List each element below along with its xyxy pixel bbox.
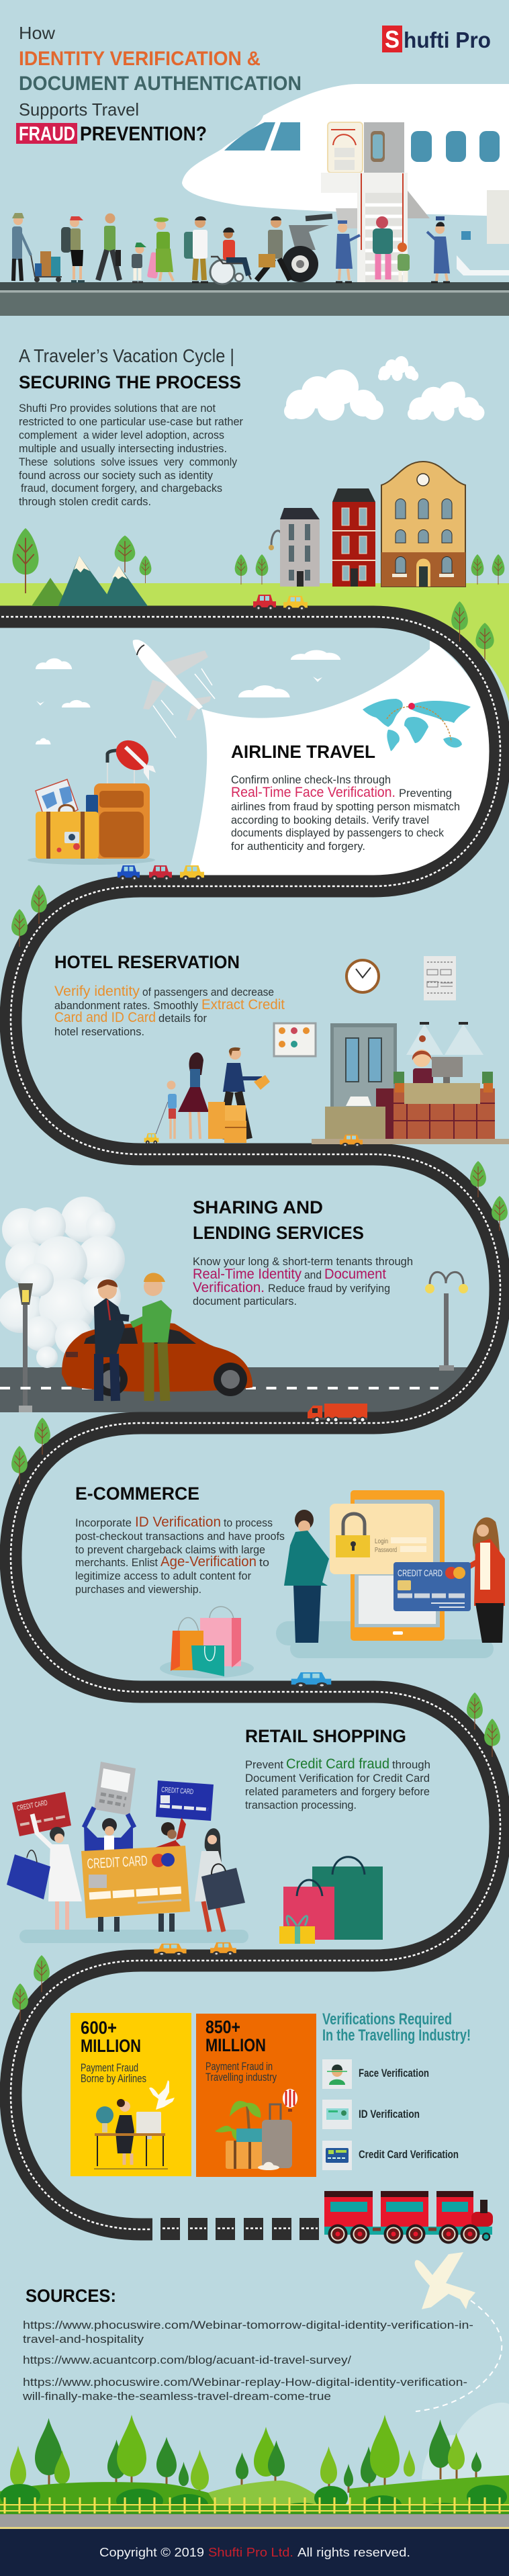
e-commerce text: to prevent chargeback claims with large <box>75 1543 265 1556</box>
footer: Shufti Pro Ltd. <box>208 2546 293 2559</box>
legs behind card <box>101 1914 172 1932</box>
red building <box>332 488 375 587</box>
person holding terminal <box>84 1807 134 1854</box>
item: face verification <box>322 2059 429 2089</box>
source links: https://www.acuantcorp.com/blog/acuant-id-travel-survey/ <box>23 2354 351 2366</box>
woman right <box>459 1517 505 1643</box>
woman in green with pink suitcase <box>147 218 173 281</box>
stat card: 850+ million: MILLION <box>205 2035 266 2055</box>
pavement <box>0 2514 509 2529</box>
item: face verification: Face Verification <box>359 2067 429 2079</box>
person holding blue card <box>154 1817 186 1851</box>
retail text: Credit Card fraud <box>286 1756 389 1772</box>
source links <box>22 2319 473 2403</box>
credit card: CREDIT CARD <box>398 1568 443 1578</box>
family with luggage <box>156 1047 270 1143</box>
credit card <box>394 1562 471 1611</box>
title: How <box>19 23 55 43</box>
woman climbing stairs <box>373 216 393 280</box>
sharing text <box>193 1255 413 1307</box>
airplane at the gate <box>182 84 509 244</box>
lamp post left <box>18 1283 33 1412</box>
world map <box>363 699 471 751</box>
orange car <box>62 1322 252 1396</box>
title: FRAUD <box>19 123 75 145</box>
icon: palm trees and luggage <box>215 2101 292 2170</box>
retail text: through <box>392 1758 430 1771</box>
blue card: CREDIT CARD <box>161 1786 194 1796</box>
intro paragraph: complement a wider level adoption, across <box>19 429 224 441</box>
airline text <box>231 773 460 853</box>
payment terminal <box>94 1762 136 1815</box>
hotel text: Extract Credit <box>201 997 285 1013</box>
e-commerce text: legitimize access to adult content for <box>75 1570 251 1582</box>
stat card: 850+ million: Payment Fraud in <box>205 2060 273 2073</box>
child climbing stairs <box>398 243 410 281</box>
white airline panel <box>188 638 490 875</box>
intro paragraph: These solutions solve issues very commonly <box>19 456 237 468</box>
hotel text: hotel reservations. <box>54 1025 144 1038</box>
bushes <box>0 2484 507 2516</box>
reception desk with receptionist <box>312 1035 509 1144</box>
section heading: vacation cycle: A Traveler’s Vacation Cycle | <box>19 345 234 366</box>
hotel text: Verify identity <box>54 984 140 999</box>
cars on road <box>118 865 204 882</box>
truck <box>308 1404 367 1422</box>
train <box>324 2191 493 2244</box>
e-commerce text: to process <box>224 1516 273 1529</box>
hotel text: of passengers and decrease <box>142 986 274 998</box>
grey building <box>280 508 320 587</box>
stat card: 600+ million <box>71 2013 191 2176</box>
retail text <box>245 1756 430 1811</box>
hotel text: Card and ID Card <box>54 1010 156 1025</box>
airline text: documents displayed by passengers to check <box>231 826 444 839</box>
sharing text: Know your long & short-term tenants through <box>193 1255 413 1268</box>
hotel text: details for <box>158 1012 207 1025</box>
trunks <box>49 2466 476 2493</box>
online payment illustration <box>276 1490 505 1658</box>
intro paragraph: restricted to one particular use-case but rather <box>19 415 243 428</box>
icon: agent at desk <box>94 2099 168 2169</box>
red card <box>12 1792 71 1836</box>
hills <box>0 2482 295 2514</box>
woman in white with blue bag <box>7 1814 82 1930</box>
man with backpack <box>184 216 208 282</box>
intro paragraph: fraud, document forgery, and chargebacks <box>21 482 222 495</box>
hotel text: abandonment rates. Smoothly <box>54 999 198 1012</box>
winding road <box>0 617 500 2229</box>
e-commerce text: Age-Verification <box>160 1554 257 1570</box>
forest landscape <box>0 2415 509 2516</box>
airline text: Preventing <box>399 787 452 800</box>
tan building <box>381 462 465 587</box>
intro paragraph: through stolen credit cards. <box>19 495 151 508</box>
sharing text: document particulars. <box>193 1295 297 1307</box>
e-commerce text: to <box>259 1556 269 1569</box>
sharing text: Document <box>324 1266 386 1282</box>
father <box>222 1047 270 1139</box>
flight attendant left <box>336 220 360 282</box>
landing gear <box>282 214 332 282</box>
source links: will-finally-make-the-seamless-travel-dream-come-true <box>22 2390 331 2403</box>
boarding stairs <box>357 173 408 282</box>
source links: https://www.phocuswire.com/Webinar-tomorrow-digital-identity-verification-in- <box>23 2319 473 2331</box>
fence <box>0 2497 509 2514</box>
blue sign <box>461 231 471 240</box>
woman with dark bag <box>195 1828 245 1932</box>
grey street <box>0 1367 470 1412</box>
airline text: for authenticity and forgery. <box>231 840 365 853</box>
icon: hot air balloon <box>283 2089 297 2112</box>
logo: Shufti Pro: S <box>385 26 400 53</box>
retail text: Document Verification for Credit Card <box>245 1772 430 1785</box>
online payment illustration: Login <box>375 1538 388 1545</box>
big credit card <box>81 1846 190 1918</box>
source links: travel-and-hospitality <box>23 2333 144 2346</box>
boy with cap <box>132 243 146 282</box>
ground runway <box>0 282 509 316</box>
man in green <box>132 1273 172 1401</box>
town cars <box>253 595 308 611</box>
title: Supports Travel <box>19 99 139 120</box>
small distant plane <box>457 255 509 275</box>
intro paragraph: found across our society such as identity <box>19 469 213 482</box>
delivery vans <box>154 1942 236 1957</box>
street lamp in town <box>269 531 297 587</box>
sharing text: and <box>304 1269 322 1281</box>
title: IDENTITY VERIFICATION & <box>19 48 261 70</box>
heading: hotel reservation: HOTEL RESERVATION <box>54 952 240 972</box>
mother <box>178 1052 209 1139</box>
e-commerce text: Incorporate <box>75 1516 132 1529</box>
airplane with dashed trail <box>415 2252 502 2411</box>
intro paragraph: multiple and usually intersecting industries. <box>19 442 227 455</box>
online payment illustration: Password <box>375 1547 397 1554</box>
trees along the landscape <box>11 528 508 2020</box>
exhaust smoke <box>0 1197 125 1368</box>
stat card: 850+ million <box>196 2014 316 2177</box>
heading: retail shopping: RETAIL SHOPPING <box>245 1726 406 1746</box>
key board <box>274 1023 316 1056</box>
title: DOCUMENT AUTHENTICATION <box>19 73 302 95</box>
intro paragraph: Shufti Pro provides solutions that are not <box>19 402 216 415</box>
luggage <box>208 1102 246 1143</box>
small flat clouds and birds <box>36 650 340 744</box>
retail text: related parameters and forgery before <box>245 1785 430 1798</box>
heading: sharing and lending services: SHARING AND <box>193 1197 323 1217</box>
section heading: vacation cycle <box>19 345 241 392</box>
businessman with briefcase <box>257 216 290 280</box>
title: PREVENTION? <box>80 123 207 145</box>
footer: Copyright © 2019 <box>99 2546 204 2559</box>
man in suit <box>94 1279 129 1401</box>
two men shaking hands <box>94 1273 172 1401</box>
e-commerce text: purchases and viewership. <box>75 1583 201 1596</box>
heading: sharing and lending services <box>193 1197 364 1243</box>
source links: https://www.phocuswire.com/Webinar-replay-How-digital-identity-verification- <box>23 2376 467 2389</box>
wall notice <box>424 956 456 1000</box>
verifications required panel: Verifications Required <box>322 2010 452 2028</box>
retail text: transaction processing. <box>245 1799 357 1811</box>
airline text: Confirm online check-Ins through <box>231 773 391 786</box>
airline text: Real-Time Face Verification. <box>231 785 396 800</box>
hotel text <box>54 984 285 1038</box>
blue card <box>156 1780 214 1821</box>
item: credit card verification: Credit Card Verification <box>359 2148 459 2161</box>
airplane flying <box>133 640 215 738</box>
stat card: 600+ million: MILLION <box>81 2036 141 2056</box>
stat card: 850+ million: 850+ <box>205 2017 240 2037</box>
airline text: according to booking details. Verify travel <box>231 814 429 826</box>
sharing text: Verification. <box>193 1280 265 1295</box>
stat card: 600+ million: Borne by Airlines <box>81 2072 146 2085</box>
child <box>156 1080 177 1139</box>
airline text: airlines from fraud by spotting person mismatch <box>231 800 460 813</box>
street dashes <box>0 1387 438 1389</box>
toy car and van <box>144 1133 363 1148</box>
man left <box>284 1510 329 1643</box>
red card: CREDIT CARD <box>16 1799 48 1813</box>
sources heading: SOURCES: <box>26 2286 116 2306</box>
grass band <box>0 583 509 702</box>
man with phone <box>98 214 121 280</box>
shopping bags <box>160 1606 254 1678</box>
retail crowd with credit cards <box>7 1762 248 1943</box>
heading: airline travel: AIRLINE TRAVEL <box>231 742 375 762</box>
stat card: 850+ million: Travelling industry <box>205 2071 277 2084</box>
ceiling lamps <box>406 1022 483 1055</box>
footer: All rights reserved. <box>297 2546 410 2559</box>
stat card: 600+ million: Payment Fraud <box>81 2061 138 2074</box>
item: id verification: ID Verification <box>359 2108 420 2120</box>
suitcases with hat and map <box>28 734 156 865</box>
logo: Shufti Pro: hufti Pro <box>404 28 491 52</box>
sharing text: Reduce fraud by verifying <box>268 1282 390 1295</box>
e-commerce text <box>75 1514 285 1596</box>
section heading: vacation cycle: SECURING THE PROCESS <box>19 372 241 392</box>
passengers queue <box>12 213 471 284</box>
retail text: Prevent <box>245 1758 283 1771</box>
hotel door <box>330 1023 397 1107</box>
icon: plane <box>149 2080 175 2110</box>
man with cart <box>12 213 62 282</box>
trees <box>10 2415 481 2490</box>
clouds <box>284 356 484 421</box>
e-commerce text: ID Verification <box>135 1514 221 1530</box>
footer <box>0 2529 509 2576</box>
wall clock <box>346 960 379 992</box>
flight attendant right <box>427 216 450 282</box>
heading: e-commerce: E-COMMERCE <box>75 1484 199 1504</box>
distant cloud <box>422 2403 509 2479</box>
gift and shopping bags <box>279 1857 383 1944</box>
big credit card: CREDIT CARD <box>87 1853 148 1872</box>
e-commerce text: merchants. Enlist <box>75 1556 158 1569</box>
blue car <box>291 1672 331 1688</box>
title <box>16 23 302 145</box>
item: id verification <box>322 2100 420 2129</box>
heading: sharing and lending services: LENDING SERVICES <box>193 1223 364 1243</box>
road blocks before the train <box>160 2218 319 2240</box>
lamp post right <box>425 1272 468 1371</box>
woman with backpack <box>61 216 85 282</box>
mountains <box>32 556 148 606</box>
verifications required panel <box>322 2010 471 2170</box>
wheelchair user <box>210 227 251 284</box>
item: credit card verification <box>322 2141 459 2170</box>
intro paragraph <box>19 402 243 508</box>
sharing text: Real-Time Identity <box>193 1266 302 1282</box>
stat card: 600+ million: 600+ <box>81 2018 117 2038</box>
e-commerce text: post-checkout transactions and have proofs <box>75 1530 285 1543</box>
